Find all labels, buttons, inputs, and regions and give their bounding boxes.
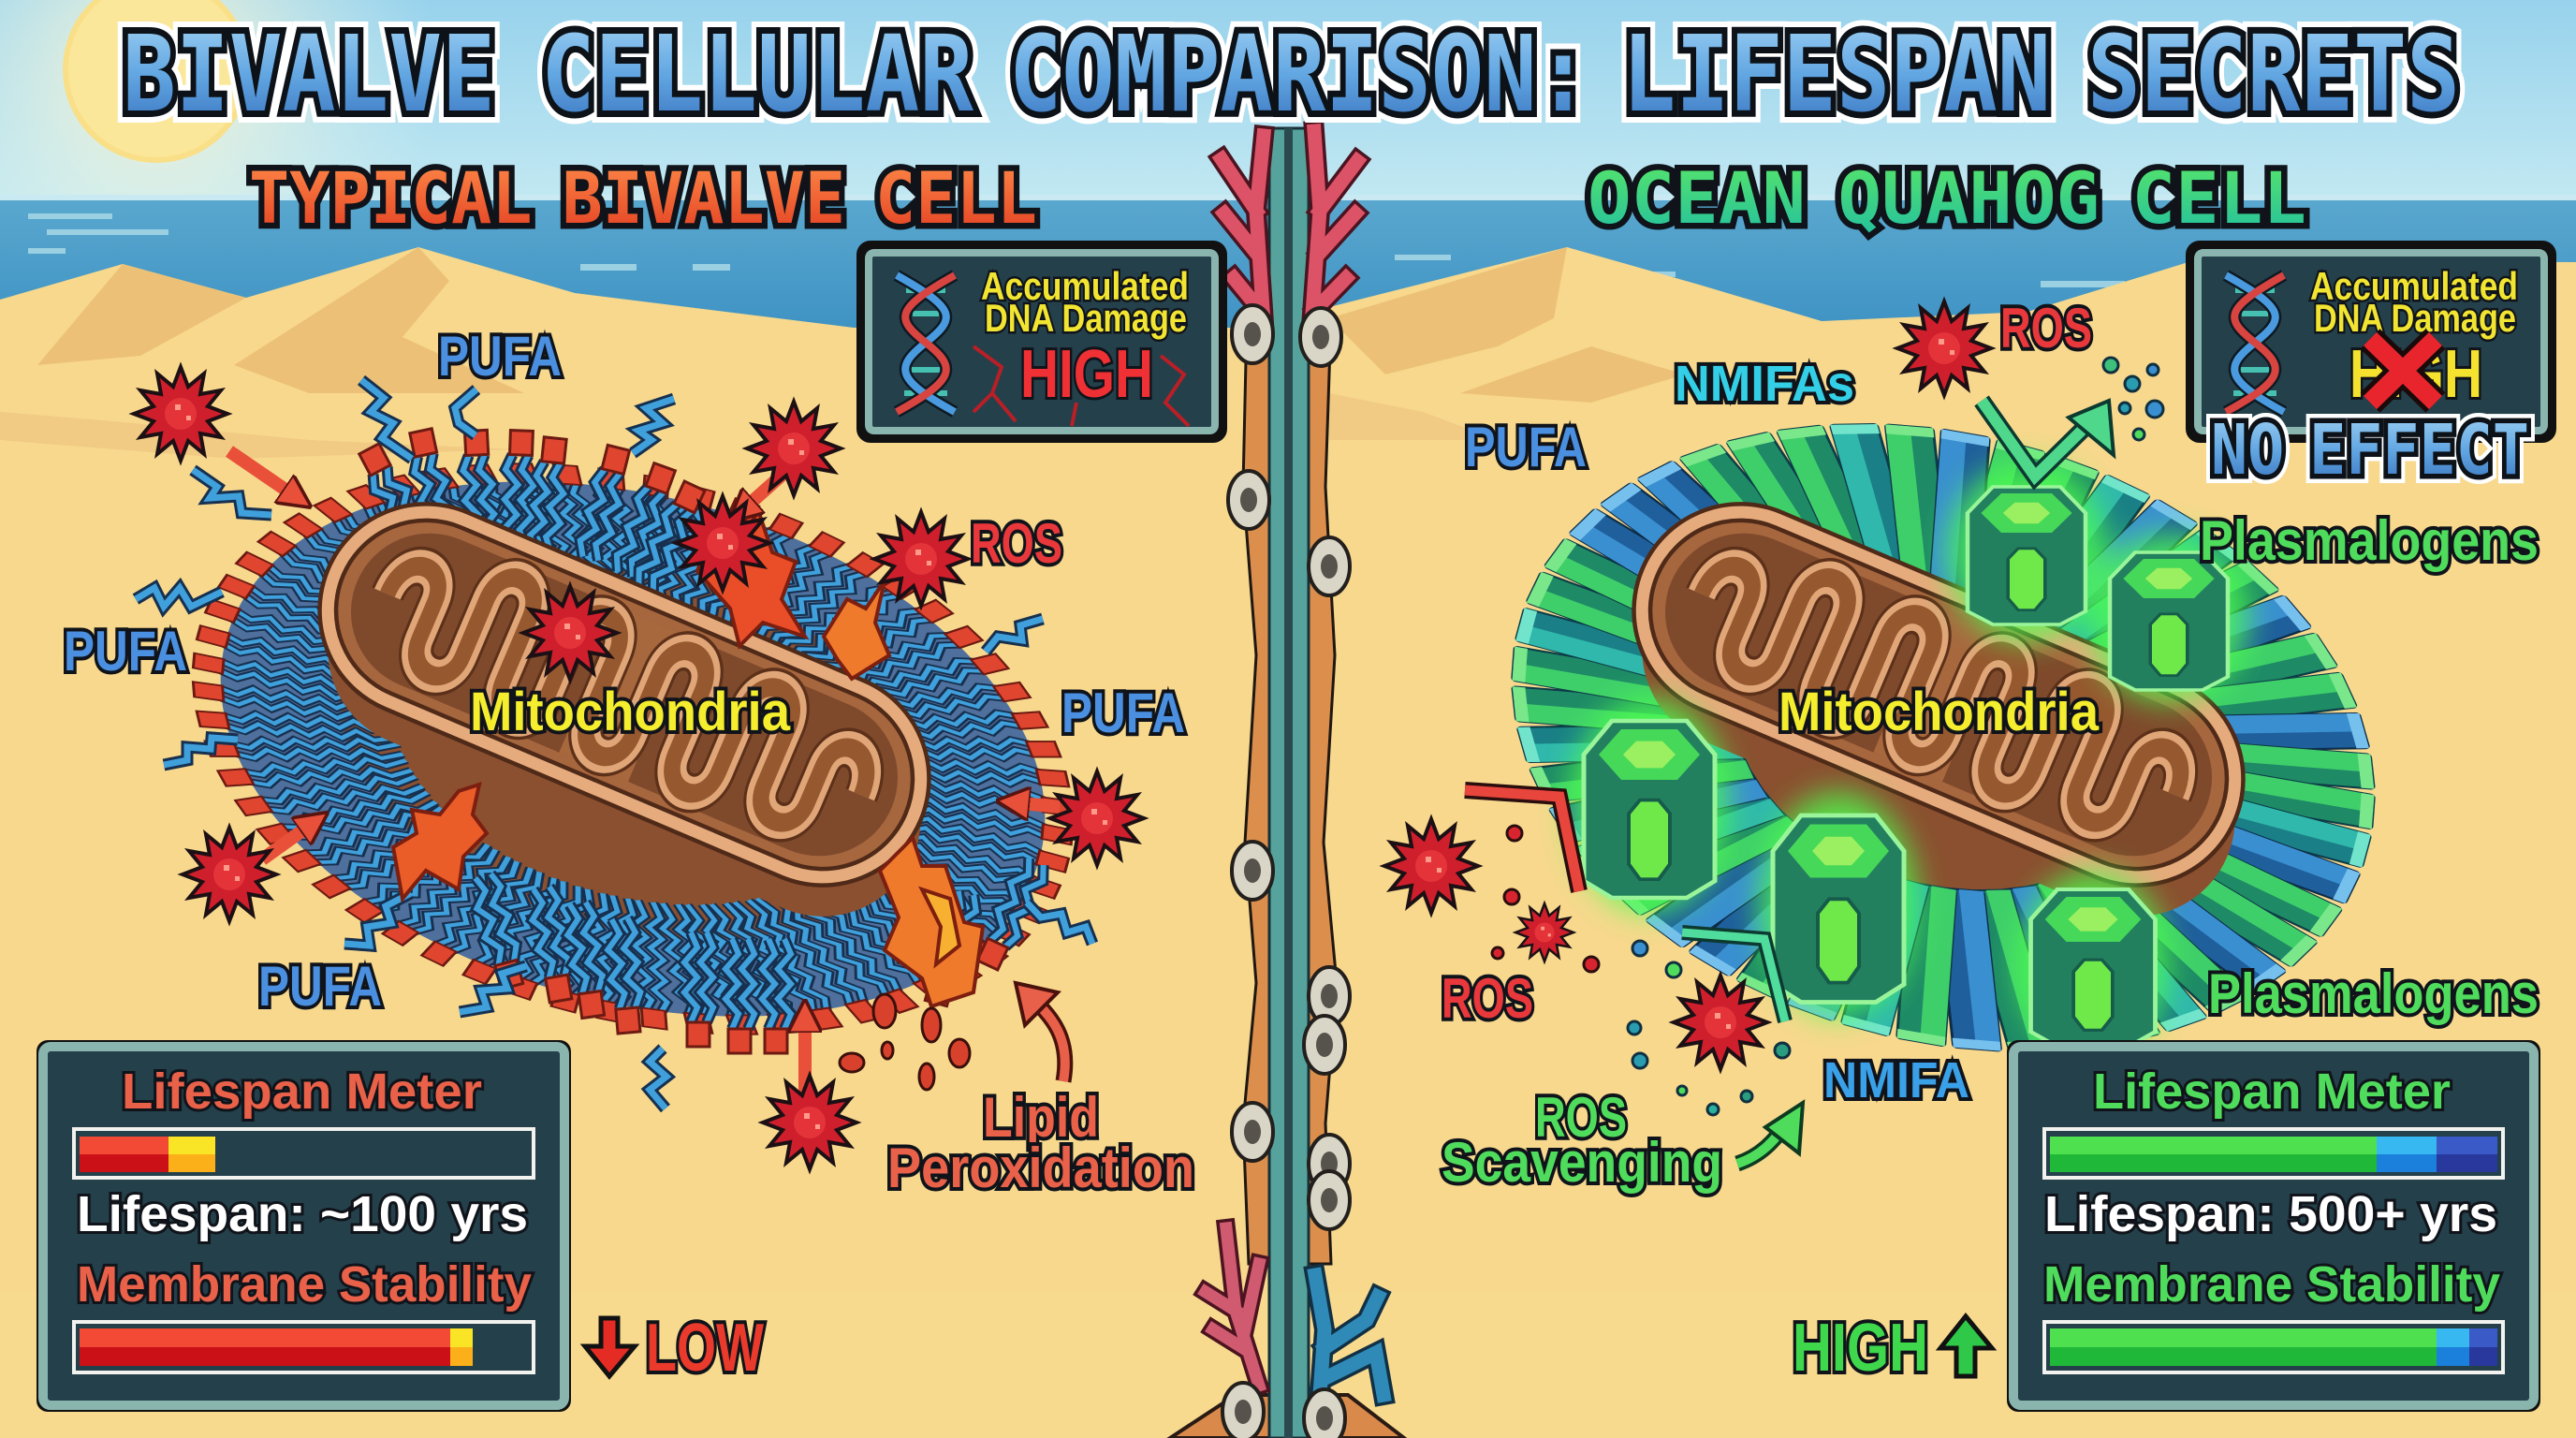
label: PUFA left: PUFA [64, 620, 187, 682]
arrow: scavenging [1737, 1103, 1803, 1164]
ROS radicals [134, 367, 1144, 1169]
stability bar [74, 1322, 534, 1372]
scavenging arrow [1682, 932, 1785, 1021]
heading: lifespan meter: Lifespan Meter [2093, 1064, 2451, 1120]
heading: membrane stability: Membrane Stability [77, 1256, 532, 1313]
barnacles [1222, 305, 1350, 1438]
mitochondrion [298, 481, 951, 947]
background: sky [0, 0, 2576, 206]
text: accumulated DNA damage: DNA Damage [985, 296, 1187, 340]
stable lipid membrane ring [1442, 332, 2445, 1143]
panel: right lifespan meter [2007, 1040, 2540, 1412]
bottom corals [1206, 1228, 1383, 1395]
text: NO EFFECT: NO EFFECT [2211, 410, 2529, 491]
arrow: lipid peroxidation [1016, 983, 1065, 1081]
title: SECRETS [2087, 14, 2460, 136]
label: Mitochondria: Mitochondria [470, 682, 791, 742]
deflection arrow top [1982, 401, 2114, 477]
label: Lipid Peroxidation: Peroxidation [887, 1137, 1194, 1199]
text: accumulated DNA damage [981, 264, 1189, 340]
indicator: HIGH: HIGH [1793, 1311, 1928, 1386]
hanging lipids bottom [469, 856, 1049, 1053]
panel: ocean quahog membrane diagram [1384, 297, 2539, 1194]
label: Lipid Peroxidation: Lipid [983, 1086, 1099, 1149]
text: accumulated DNA damage: DNA Damage [2314, 296, 2516, 340]
label: PUFA bottom: PUFA [258, 955, 382, 1018]
icon: DNA helix [2226, 275, 2284, 412]
background: sea [0, 195, 2576, 346]
panel: left lifespan meter [37, 1040, 571, 1412]
title: LIFESPAN [1622, 14, 2051, 136]
title: COMPARISON: [1009, 14, 1589, 136]
lifespan bar [74, 1129, 534, 1178]
lifespan bar [2044, 1129, 2503, 1178]
ROS attack arrows [229, 451, 1060, 1100]
damage cracks [973, 346, 1189, 426]
antioxidant particles [1628, 358, 2163, 1115]
text: HIGH: HIGH [1020, 337, 1153, 412]
deflected ROS arrow [1465, 790, 1579, 891]
heading: lifespan meter: Lifespan Meter [122, 1064, 482, 1120]
label: PUFA right: PUFA [1061, 682, 1185, 744]
icon: DNA helix [897, 275, 955, 412]
lipid damage bursts [393, 510, 983, 1006]
stability bar [2044, 1322, 2503, 1372]
title: COMPARISON: [1009, 14, 1589, 136]
label: Plasmalogens top: Plasmalogens [2200, 509, 2539, 572]
ROS radicals [1384, 301, 1991, 1069]
label: Plasmalogens bottom: Plasmalogens [2208, 962, 2539, 1025]
plasmalogen blocks [1584, 487, 2228, 1047]
label: ROS Scavenging [1442, 1086, 1722, 1194]
sand mound [1170, 1395, 1404, 1438]
title: SECRETS [2087, 14, 2460, 136]
panel: typical bivalve membrane diagram [64, 325, 1194, 1199]
mitochondrion [1612, 481, 2265, 947]
panel: DNA damage high [861, 245, 1222, 438]
label: ROS Scavenging: ROS [1535, 1086, 1627, 1149]
plasmalogen glow [1570, 463, 2248, 1058]
text: accumulated DNA damage [2310, 264, 2518, 340]
label: NMIFAs: NMIFAs [1675, 356, 1854, 412]
title [123, 14, 2460, 136]
title: CELLULAR [541, 14, 973, 136]
text: accumulated DNA damage: Accumulated [2310, 264, 2518, 308]
orange crust [1243, 318, 1269, 1264]
heading: typical bivalve cell: TYPICAL BIVALVE CELL [249, 156, 1037, 240]
heading: membrane stability: Membrane Stability [2043, 1256, 2500, 1313]
damaged lipid membrane ring [129, 373, 1136, 1125]
text: accumulated DNA damage: Accumulated [981, 264, 1189, 308]
label: PUFA top: PUFA [438, 325, 562, 388]
label: ROS Scavenging: Scavenging [1442, 1131, 1722, 1194]
panel: DNA damage no effect [2190, 245, 2552, 491]
label: Mitochondria: Mitochondria [1778, 682, 2100, 742]
icon: red X [2370, 339, 2436, 403]
lipid debris [840, 994, 970, 1090]
title: CELLULAR [541, 14, 973, 136]
label: Lipid Peroxidation [887, 1086, 1194, 1199]
stray fatty acid tails [136, 380, 1092, 1108]
label: ROS top: ROS [2000, 297, 2092, 360]
title: BIVALVE [123, 14, 495, 136]
text: lifespan value: Lifespan: ~100 yrs [77, 1186, 528, 1242]
title: BIVALVE [123, 14, 495, 136]
upright lipids top [356, 428, 708, 595]
text: HIGH crossed out: HIGH [2349, 337, 2482, 412]
red fragments [1492, 826, 1599, 972]
divider: reef pole [1170, 128, 1404, 1438]
text: NO EFFECT: NO EFFECT [2211, 410, 2529, 491]
heading: ocean quahog cell: OCEAN QUAHOG CELL [1588, 156, 2306, 240]
title: LIFESPAN [1622, 14, 2051, 136]
indicator: LOW [585, 1311, 764, 1386]
top coral [1222, 131, 1357, 323]
label: NMIFA: NMIFA [1823, 1052, 1969, 1108]
indicator: LOW: LOW [646, 1311, 764, 1386]
pole [1269, 128, 1309, 1438]
background: sun [0, 0, 437, 350]
label: ROS bottom: ROS [1442, 967, 1533, 1030]
label: PUFA: PUFA [1465, 416, 1587, 478]
text: lifespan value: Lifespan: 500+ yrs [2044, 1186, 2497, 1242]
label: ROS: ROS [971, 512, 1062, 575]
